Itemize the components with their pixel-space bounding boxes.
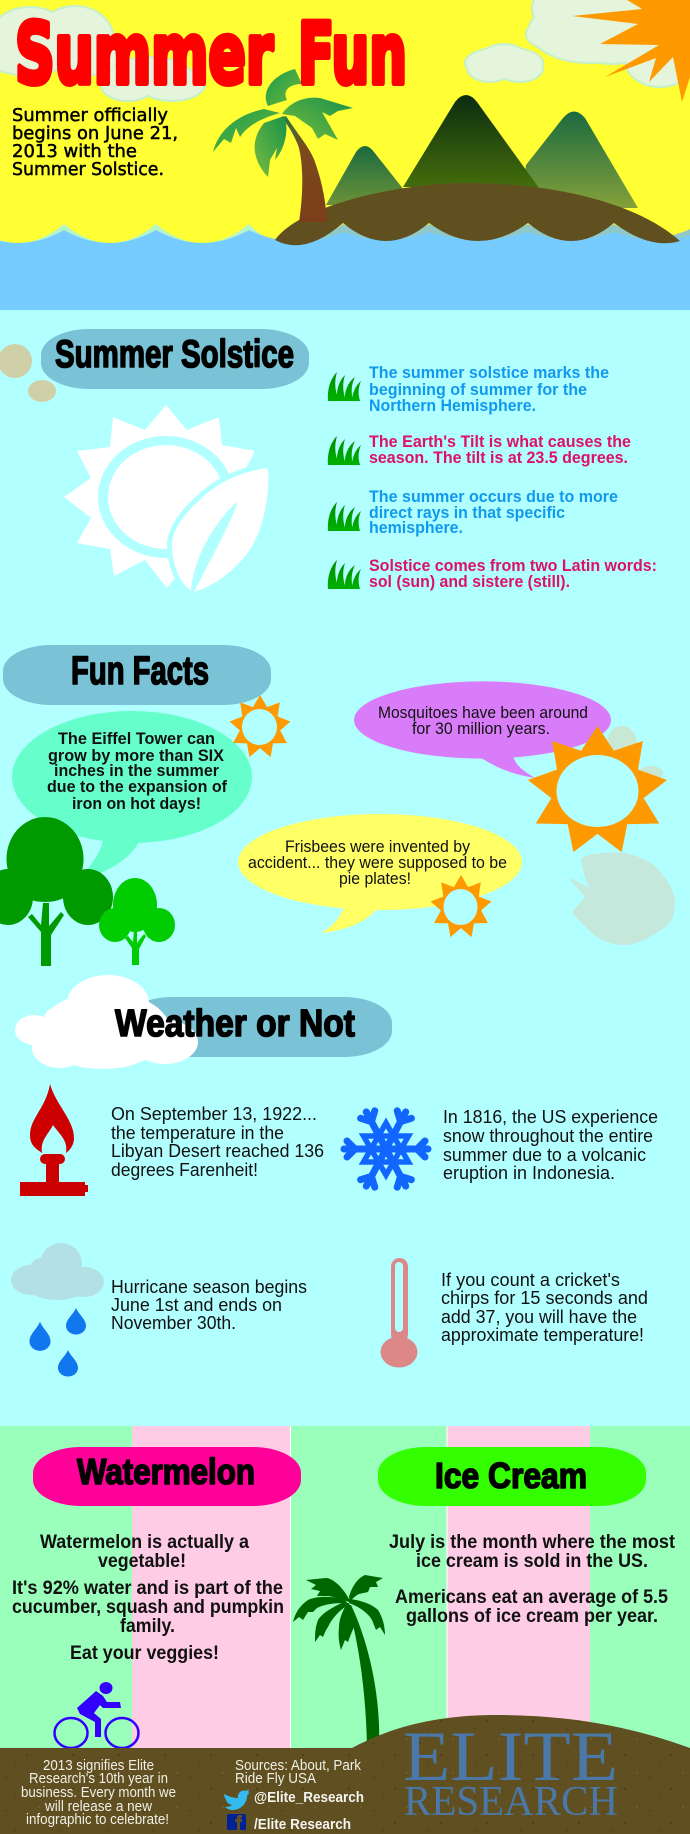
bubble: eiffel tower: due to the expansion of: [47, 778, 227, 796]
text: libyan desert: [111, 1103, 324, 1180]
panel: summer solstice: [0, 329, 657, 592]
bubble: frisbees: [238, 814, 522, 933]
bubble: frisbees: Frisbees were invented by: [285, 837, 470, 856]
icon: small tree: [99, 878, 175, 965]
fact: northern hemisphere: The summer solstice marks the: [369, 364, 609, 382]
bubble: eiffel tower: [12, 711, 252, 880]
cloud: [15, 975, 198, 1069]
thought circles: [0, 344, 56, 402]
faded clouds: [607, 726, 663, 780]
icon: large tree: [0, 817, 113, 966]
heading: Weather or Not: [115, 1003, 355, 1045]
panel: header: [0, 0, 690, 310]
text: snow in 1816: [443, 1106, 658, 1183]
fact: latin words: [369, 557, 657, 591]
text: cricket chirps: chirps for 15 seconds and: [441, 1287, 648, 1308]
panel: fun facts: [0, 645, 675, 966]
text: hurricane season: June 1st and ends on: [111, 1294, 282, 1315]
sources: Ride Fly USA: [235, 1770, 316, 1787]
fact: northern hemisphere: beginning of summer for the: [369, 381, 587, 399]
intro text: begins on June 21,: [12, 123, 178, 144]
text: hurricane season: [111, 1276, 307, 1333]
icon: flame burner: [20, 1084, 88, 1196]
text: snow in 1816: In 1816, the US experience: [443, 1106, 658, 1127]
fact: direct rays: [369, 488, 618, 537]
icon: sun on frisbee bubble: [431, 875, 491, 937]
intro text: Summer officially: [12, 105, 168, 126]
sources: [235, 1757, 361, 1787]
fact: direct rays: The summer occurs due to more: [369, 488, 618, 506]
bubble: frisbees: accident... they were supposed to be: [248, 853, 507, 872]
sea: [0, 224, 690, 310]
fact: northern hemisphere: [369, 364, 609, 415]
watermelon text: [12, 1532, 284, 1664]
hill: [0, 1715, 690, 1834]
watermelon text: Eat your veggies!: [70, 1643, 219, 1664]
island: [275, 183, 680, 245]
fact: latin words: sol (sun) and sistere (still).: [369, 573, 570, 591]
anniversary text: Research's 10th year in: [29, 1770, 168, 1787]
ice cream text: July is the month where the most: [389, 1532, 676, 1553]
anniversary text: [21, 1757, 176, 1828]
icon: sun and leaf: [64, 405, 268, 592]
text: snow in 1816: summer due to a volcanic: [443, 1144, 646, 1165]
watermelon pill: [33, 1447, 301, 1506]
icon: grass 2: [328, 436, 361, 465]
panel: weather or not: [11, 975, 658, 1376]
bubble: eiffel tower: iron on hot days!: [72, 795, 201, 813]
ice cream heading: Ice Cream: [435, 1455, 587, 1496]
icon: thermometer: [380, 1258, 418, 1368]
facebook handle: /Elite Research: [254, 1816, 351, 1833]
watermelon text: vegetable!: [98, 1551, 186, 1572]
fact: direct rays: direct rays in that specific: [369, 504, 565, 522]
panel: striped food section: [0, 1426, 690, 1756]
icon: large sun: [528, 726, 667, 852]
icon: palm silhouette: [293, 1575, 385, 1747]
sun rays: [572, 0, 690, 102]
ice cream text: ice cream is sold in the US.: [416, 1551, 648, 1572]
title: Summer: [15, 5, 273, 103]
text: snow in 1816: snow throughout the entire: [443, 1125, 653, 1146]
text: snow in 1816: eruption in Indonesia.: [443, 1162, 615, 1183]
sources: Sources: About, Park: [235, 1757, 361, 1774]
icon: grass 4: [328, 560, 361, 589]
twitter handle: @Elite_Research: [254, 1789, 364, 1806]
text: cricket chirps: add 37, you will have the: [441, 1306, 637, 1327]
heading pill: [124, 997, 392, 1057]
heading: Summer Solstice: [55, 333, 294, 376]
icon: grass 3: [328, 502, 361, 531]
heading: Fun Facts: [71, 649, 209, 693]
bubble: mosquitoes: Mosquitoes have been around: [378, 703, 588, 722]
text: cricket chirps: approximate temperature!: [441, 1324, 644, 1345]
bubble: eiffel tower: inches in the summer: [54, 762, 220, 780]
watermelon heading: Watermelon: [77, 1451, 255, 1492]
anniversary text: 2013 signifies Elite: [43, 1757, 154, 1774]
title: Fun: [298, 5, 407, 103]
intro text: [12, 105, 178, 180]
logo: ELITE: [403, 1718, 618, 1796]
anniversary text: will release a new: [44, 1798, 152, 1815]
palm tree: [213, 69, 353, 222]
icon: facebook: [227, 1814, 246, 1830]
bubble: mosquitoes: [354, 681, 611, 778]
text: libyan desert: degrees Farenheit!: [111, 1159, 258, 1180]
mountains: [326, 95, 638, 208]
heading pill: [3, 645, 271, 705]
icon: snowflake: [344, 1108, 428, 1190]
ice cream text: gallons of ice cream per year.: [406, 1606, 658, 1627]
watermelon text: It's 92% water and is part of the: [12, 1578, 283, 1599]
ice cream text: Americans eat an average of 5.5: [395, 1587, 668, 1608]
text: libyan desert: On September 13, 1922...: [111, 1103, 317, 1124]
anniversary text: business. Every month we: [21, 1784, 176, 1801]
fact: northern hemisphere: Northern Hemisphere.: [369, 397, 536, 415]
intro text: 2013 with the: [12, 141, 137, 162]
watermelon text: Watermelon is actually a: [40, 1532, 249, 1553]
watermelon text: family.: [120, 1616, 175, 1637]
logo: [403, 1718, 618, 1825]
logo: RESEARCH: [404, 1779, 618, 1825]
ice cream text: [389, 1532, 676, 1627]
fact: direct rays: hemisphere.: [369, 519, 463, 537]
watermelon text: cucumber, squash and pumpkin: [12, 1597, 284, 1618]
heading pill: [41, 329, 309, 389]
panel: footer: [0, 1715, 690, 1834]
fact: earth's tilt: The Earth's Tilt is what causes the: [369, 433, 631, 451]
text: hurricane season: Hurricane season begins: [111, 1276, 307, 1297]
text: cricket chirps: [441, 1269, 648, 1345]
icon: twitter: [224, 1789, 250, 1810]
text: hurricane season: November 30th.: [111, 1312, 236, 1333]
intro text: Summer Solstice.: [12, 159, 164, 180]
bubble: mosquitoes: for 30 million years.: [412, 719, 550, 738]
text: libyan desert: the temperature in the: [111, 1122, 284, 1143]
fact: latin words: Solstice comes from two Latin words:: [369, 557, 657, 575]
faded leaf: [568, 853, 675, 945]
anniversary text: infographic to celebrate!: [26, 1811, 169, 1828]
text: cricket chirps: If you count a cricket's: [441, 1269, 620, 1290]
ice cream pill: [378, 1447, 646, 1506]
text: libyan desert: Libyan Desert reached 136: [111, 1140, 324, 1161]
icon: cyclist: [54, 1682, 138, 1748]
bubble: eiffel tower: grow by more than SIX: [48, 747, 224, 765]
bubble: frisbees: pie plates!: [339, 869, 411, 888]
icon: small sun: [230, 695, 290, 757]
icon: grass 1: [328, 372, 361, 401]
fact: earth's tilt: [369, 433, 631, 467]
clouds: [0, 0, 690, 100]
bubble: eiffel tower: The Eiffel Tower can: [58, 730, 215, 748]
icon: rain cloud: [11, 1243, 104, 1376]
fact: earth's tilt: season. The tilt is at 23.5 degrees.: [369, 449, 628, 467]
